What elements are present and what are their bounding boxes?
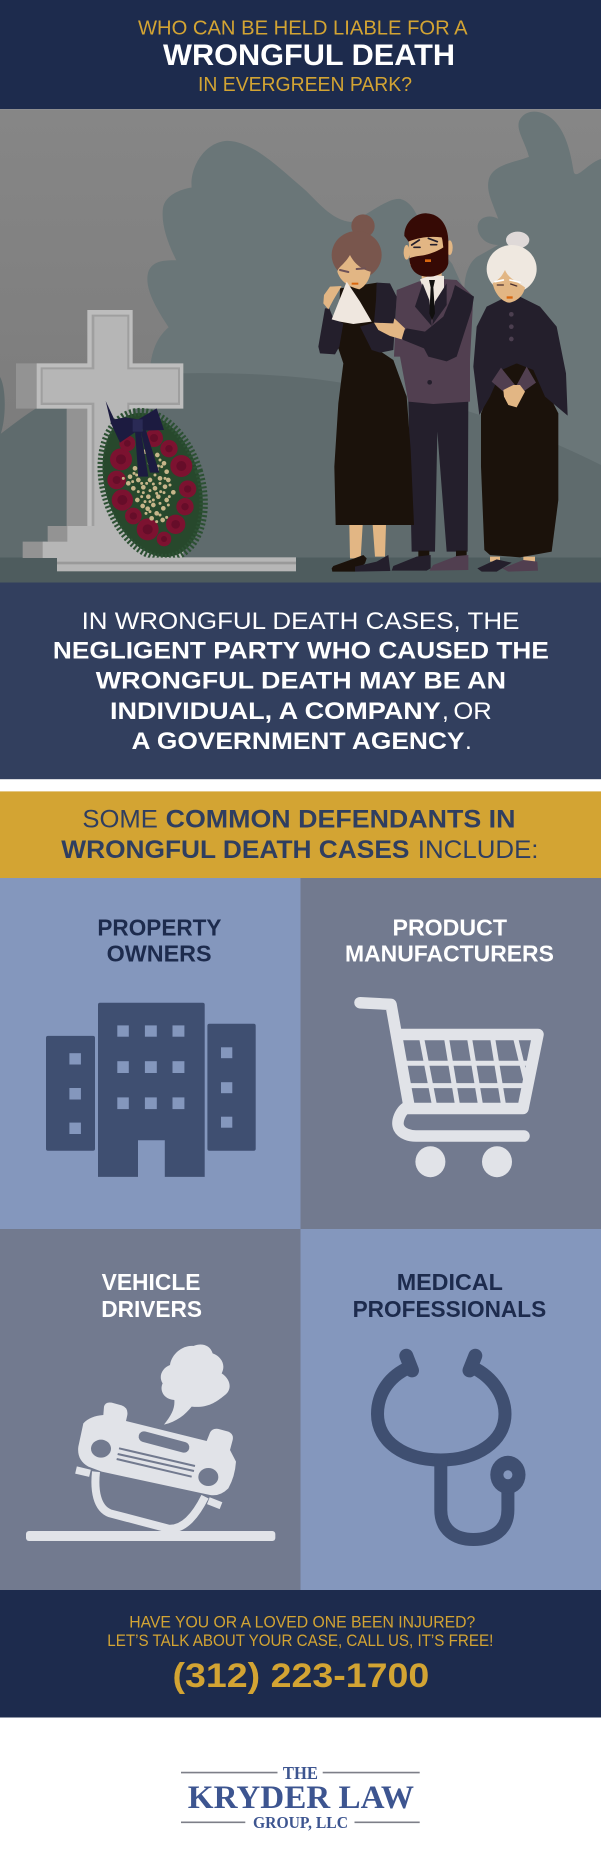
law firm logo	[181, 1763, 420, 1832]
roses	[107, 429, 196, 546]
title line 2: WRONGFUL DEATH	[163, 39, 455, 72]
intro text: A GOVERNMENT AGENCY	[132, 728, 465, 755]
heading: product manufacturers: MANUFACTURERS	[345, 940, 554, 966]
law firm logo: KRYDER LAW	[188, 1780, 414, 1816]
defendants heading	[0, 791, 601, 878]
mourning man body	[392, 213, 473, 571]
baby's breath	[128, 452, 173, 520]
cemetery scene	[0, 109, 601, 582]
icon: buildings	[46, 1003, 256, 1177]
intro text: INDIVIDUAL, A COMPANY	[110, 698, 441, 725]
heading: property owners: PROPERTY	[97, 914, 222, 940]
panel: property owners	[0, 878, 300, 1229]
mourning woman	[318, 214, 414, 572]
heading: vehicle drivers: VEHICLE	[102, 1269, 200, 1295]
law firm logo: THE	[283, 1763, 318, 1783]
icon: shopping cart	[360, 1003, 538, 1177]
intro text: ,	[442, 698, 449, 725]
intro text: IN WRONGFUL DEATH CASES, THE	[82, 608, 519, 635]
icon: overturned car	[26, 1345, 275, 1541]
panel: medical professionals	[300, 1229, 601, 1590]
defendants heading: WRONGFUL DEATH CASES	[61, 836, 409, 864]
elderly woman	[473, 232, 568, 572]
ground strip	[0, 558, 601, 582]
heading: medical professionals: MEDICAL	[397, 1269, 503, 1295]
funeral wreath	[98, 401, 208, 558]
title line 3: IN EVERGREEN PARK?	[198, 74, 412, 96]
icon: stethoscope	[378, 1356, 526, 1540]
call to action text: LET’S TALK ABOUT YOUR CASE, CALL US, IT’S FREE!	[107, 1632, 493, 1650]
gravestone cross	[16, 310, 296, 571]
heading: vehicle drivers	[101, 1269, 202, 1322]
heading: vehicle drivers: DRIVERS	[101, 1296, 202, 1322]
intro text	[53, 608, 549, 755]
law firm logo: GROUP, LLC	[253, 1813, 348, 1832]
defendants heading: COMMON DEFENDANTS IN	[166, 806, 516, 834]
intro text: OR	[453, 698, 492, 725]
call to action banner	[0, 1590, 601, 1718]
heading: medical professionals	[353, 1269, 546, 1322]
title line 1: WHO CAN BE HELD LIABLE FOR A	[138, 18, 468, 40]
intro panel	[0, 582, 601, 779]
defendants heading: SOME	[82, 806, 158, 834]
panel: product manufacturers	[300, 878, 601, 1229]
heading: product manufacturers: PRODUCT	[392, 914, 508, 940]
intro text: WRONGFUL DEATH MAY BE AN	[96, 668, 506, 695]
heading: property owners	[97, 914, 222, 966]
heading: product manufacturers	[345, 914, 554, 966]
call to action text	[107, 1613, 493, 1650]
phone number: (312) 223-1700	[172, 1657, 429, 1695]
background trees	[0, 112, 601, 559]
man's arm around woman	[374, 285, 474, 361]
heading: property owners: OWNERS	[107, 940, 212, 966]
panel: vehicle drivers	[0, 1229, 300, 1590]
heading: medical professionals: PROFESSIONALS	[353, 1296, 546, 1322]
intro text: NEGLIGENT PARTY WHO CAUSED THE	[53, 638, 549, 665]
black ribbon bow	[106, 401, 164, 477]
defendants heading: INCLUDE:	[418, 836, 538, 864]
title banner	[0, 0, 601, 109]
intro text: .	[465, 728, 472, 755]
call to action text: HAVE YOU OR A LOVED ONE BEEN INJURED?	[129, 1613, 475, 1631]
